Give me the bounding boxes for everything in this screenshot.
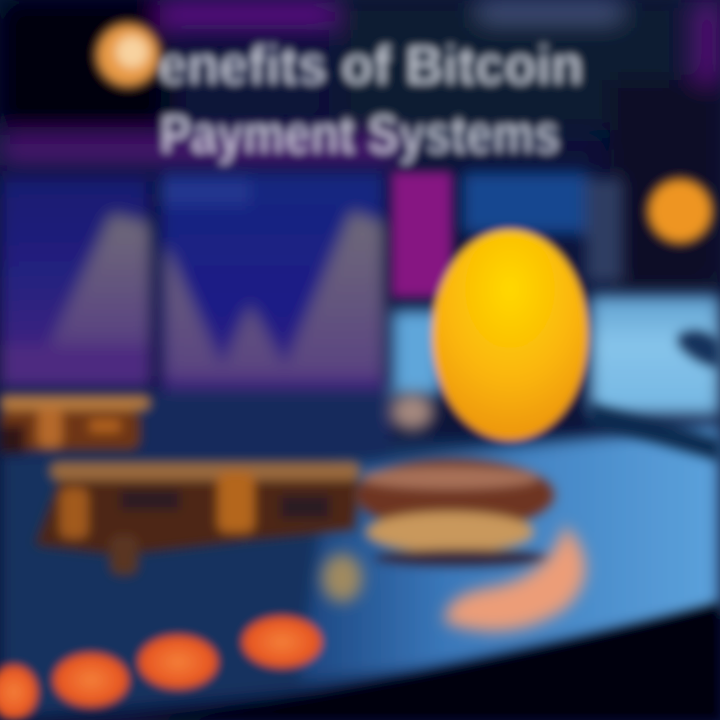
tan blob beside coin	[390, 394, 434, 430]
magenta panel	[392, 172, 452, 297]
title	[158, 34, 583, 165]
brown chain middle	[35, 462, 360, 575]
title: Payment Systems	[160, 103, 560, 165]
icon: bitcoin coin	[432, 230, 588, 440]
icon: title coin	[96, 23, 160, 87]
floor and light area	[0, 295, 720, 720]
brown chain left	[0, 396, 150, 453]
title: enefits of Bitcoin	[158, 34, 583, 96]
lower black curve	[130, 602, 720, 720]
panel: middle chart	[160, 172, 385, 440]
orange reflection	[445, 525, 585, 631]
blue panel	[462, 172, 623, 283]
dark stripe on light area	[590, 330, 720, 462]
small coin in chain	[322, 554, 362, 602]
orange pills	[0, 616, 322, 719]
top background colour blocks	[0, 0, 720, 290]
icon: small orange coin	[648, 179, 712, 243]
panel: left chart	[0, 176, 152, 390]
stacked disc	[355, 459, 555, 567]
